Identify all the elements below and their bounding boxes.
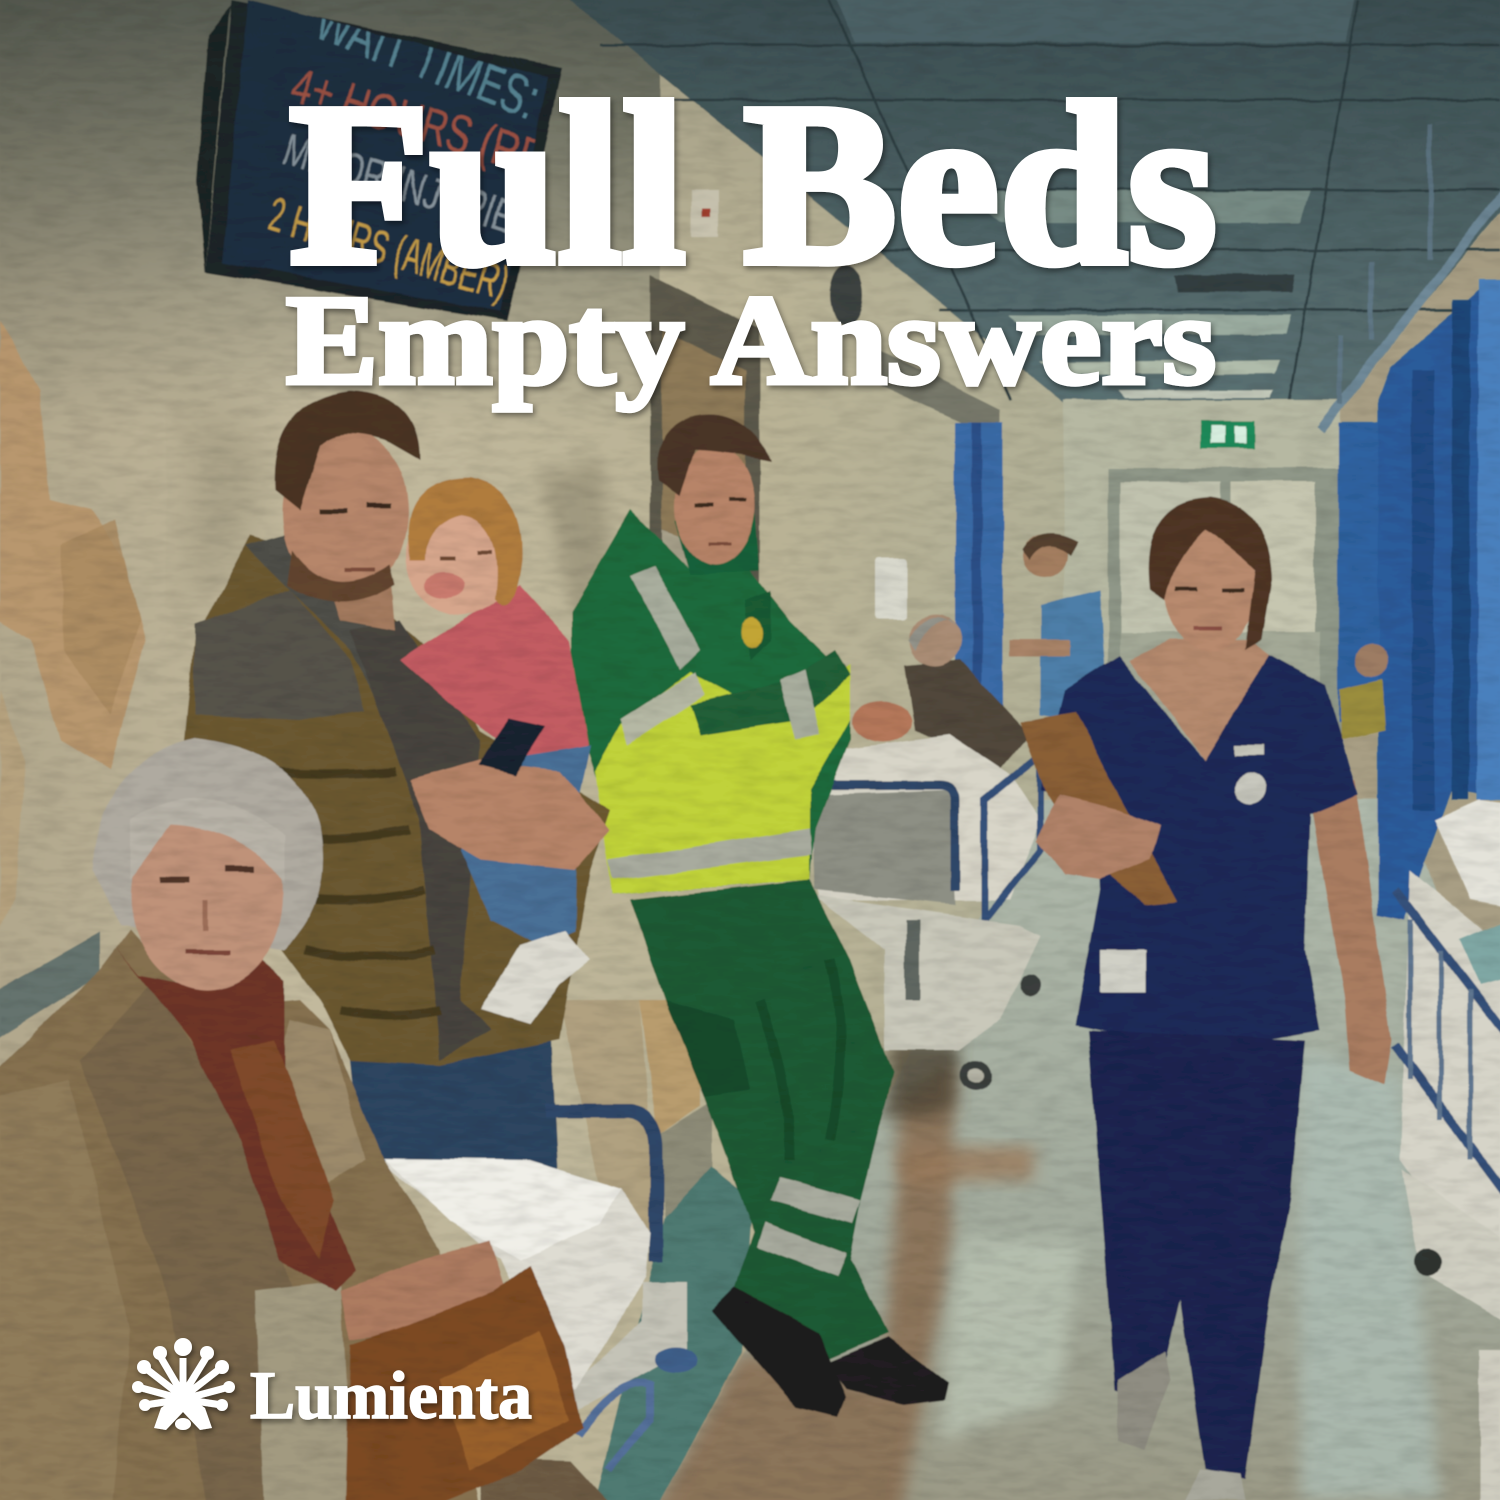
nurse in navy scrubs	[1020, 497, 1392, 1500]
clipboard	[1020, 712, 1178, 905]
far corridor wall and double doors	[1064, 400, 1340, 815]
leather handbag	[345, 1265, 583, 1500]
paramedic jacket	[572, 510, 850, 895]
ceiling	[545, 0, 1500, 425]
paramedic trousers	[630, 880, 893, 1360]
id badge	[1100, 950, 1146, 992]
wall sign: wait times	[197, 0, 588, 322]
elderly woman	[0, 738, 616, 1500]
logo wordmark: Lumienta	[250, 1357, 532, 1433]
hands	[340, 1240, 505, 1345]
scarf	[115, 945, 355, 1290]
sign text: amber hours: 2 HOURS (AMBER)	[263, 190, 514, 310]
trolley behind the paramedic	[800, 702, 1041, 1091]
nurse right arm	[1310, 780, 1392, 1085]
sign text: red hours: 4+ HOURS (RED)	[285, 57, 588, 198]
father jeans	[350, 1010, 558, 1170]
nurse top	[1040, 655, 1358, 1050]
fob watch	[1234, 745, 1266, 804]
logo icon	[132, 1338, 235, 1430]
nurse left arm	[1035, 795, 1160, 880]
doorway, alarm, clock and hand gel on wall	[650, 190, 1000, 800]
top shading	[0, 0, 1500, 300]
head and hair	[92, 738, 322, 990]
nurse trousers	[1088, 1030, 1305, 1480]
left corridor wall	[0, 0, 1100, 1500]
background patients	[905, 614, 1389, 770]
paramedic head	[657, 413, 772, 575]
sign text: minor injuries: MINOR INJURIES	[277, 123, 543, 249]
title	[286, 56, 1217, 411]
blue curtains	[955, 125, 1500, 920]
paramedic	[572, 413, 949, 1417]
title line two: Empty Answers	[286, 269, 1216, 411]
paramedic boots	[712, 1287, 949, 1417]
exit sign	[1200, 421, 1255, 449]
nurse head	[1149, 497, 1272, 651]
phone	[478, 718, 546, 775]
floor	[590, 800, 1500, 1500]
father holding child	[185, 390, 610, 1170]
nurse shoes	[1118, 1350, 1245, 1500]
title line one: Full Beds	[289, 56, 1217, 313]
father jacket	[185, 530, 610, 1065]
father head	[275, 390, 420, 630]
foreground bed with pillow	[380, 1111, 698, 1470]
right side bed	[1395, 800, 1500, 1500]
logo: Lumienta	[132, 1338, 532, 1433]
child	[400, 478, 590, 1025]
background nurse in blue	[1010, 532, 1105, 720]
coat	[0, 930, 616, 1500]
father's hands	[410, 760, 610, 870]
nurse neck	[1130, 640, 1270, 760]
